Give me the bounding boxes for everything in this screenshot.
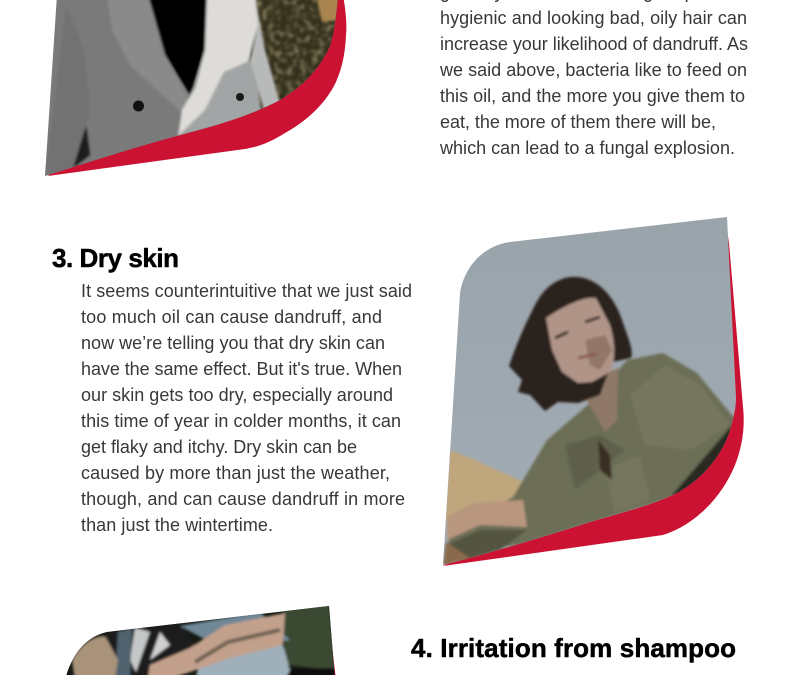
text block: dry skin explanation: our skin gets too dry, especially around: [81, 385, 393, 405]
text block: dry skin explanation: have the same effect. But it's true. When: [81, 359, 402, 379]
photo: man in grey blazer with red accent: [40, 0, 350, 180]
text block: dry skin explanation: It seems counterintuitive that we just said: [81, 281, 412, 301]
text block: dry skin explanation: [81, 281, 412, 535]
text block: dry skin explanation: caused by more than just the weather,: [81, 463, 390, 483]
text block: dry skin explanation: get flaky and itchy. Dry skin can be: [81, 437, 357, 457]
text block: dry skin explanation: too much oil can cause dandruff, and: [81, 307, 382, 327]
text block: oily hair explanation: this oil, and the more you give them to: [440, 86, 745, 106]
heading: 4. Irritation from shampoo: 4. Irritation from shampoo: [411, 633, 736, 663]
text block: dry skin explanation: this time of year in colder months, it can: [81, 411, 401, 431]
text block: oily hair explanation: increase your likelihood of dandruff. As: [440, 34, 748, 54]
photo: man with long dark hair with red accent: [440, 215, 744, 570]
text block: dry skin explanation: though, and can cause dandruff in more: [81, 489, 405, 509]
text block: dry skin explanation: now we’re telling you that dry skin can: [81, 333, 385, 353]
text block: oily hair explanation: hygienic and looking bad, oily hair can: [440, 8, 747, 28]
photo: tattooed arm with red accent: [66, 606, 336, 675]
text block: oily hair explanation: [439, 0, 748, 158]
text block: dry skin explanation: than just the wintertime.: [81, 515, 273, 535]
text block: oily hair explanation: eat, the more of them there will be,: [440, 112, 716, 132]
heading: 3. Dry skin: 3. Dry skin: [52, 243, 179, 273]
text block: oily hair explanation: we said above, bacteria like to feed on: [439, 60, 747, 80]
text block: oily hair explanation: which can lead to a fungal explosion.: [439, 138, 735, 158]
